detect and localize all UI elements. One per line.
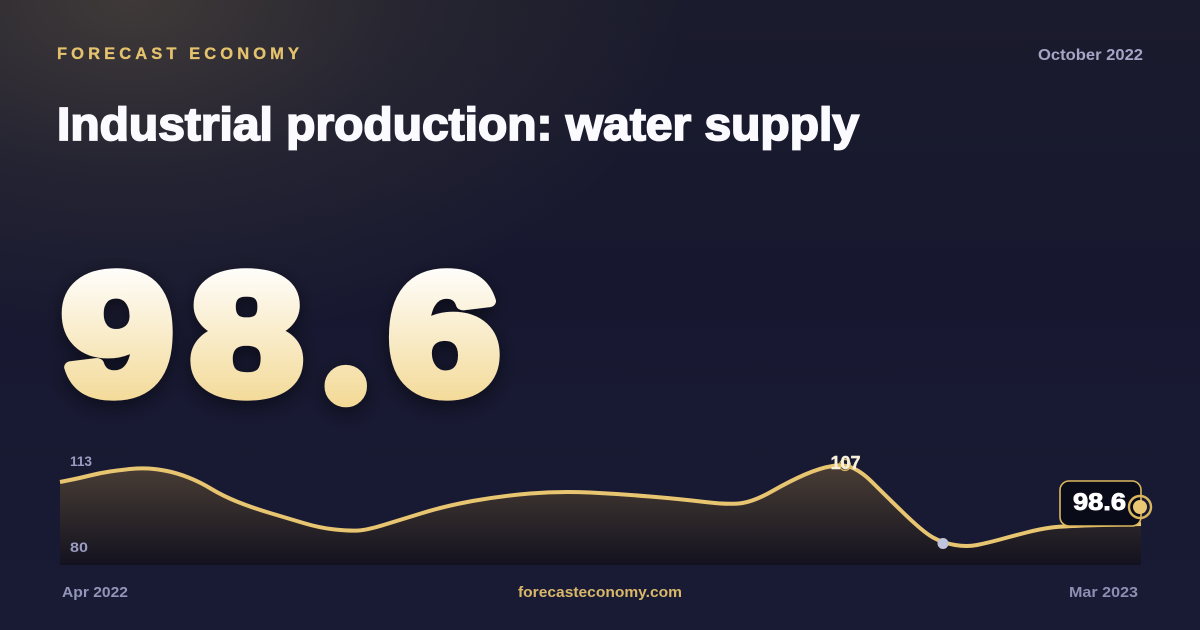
site url: forecasteconomy.com: [518, 585, 682, 601]
title: Industrial production: water supply: [57, 98, 859, 150]
axis min label: 80: [70, 539, 88, 555]
big value: [62, 171, 500, 461]
current value callout: [1060, 481, 1141, 526]
end date: Mar 2023: [1069, 585, 1138, 601]
current value callout: 98.6: [1073, 489, 1126, 516]
big value: .: [313, 171, 378, 461]
trend line: [60, 465, 1141, 546]
date: October 2022: [1038, 47, 1143, 64]
area fill: [60, 465, 1141, 565]
start date: Apr 2022: [62, 585, 128, 601]
big value: 6: [389, 240, 500, 430]
low point marker: [938, 538, 948, 549]
sparkline chart: [60, 453, 1151, 565]
end marker: [1129, 496, 1151, 518]
peak marker: [840, 460, 850, 470]
peak value: 107: [830, 453, 861, 473]
big value: 8: [191, 240, 302, 430]
brand eyebrow: FORECAST ECONOMY: [57, 45, 299, 63]
axis max label: 113: [70, 454, 92, 469]
big value: 9: [62, 240, 173, 430]
